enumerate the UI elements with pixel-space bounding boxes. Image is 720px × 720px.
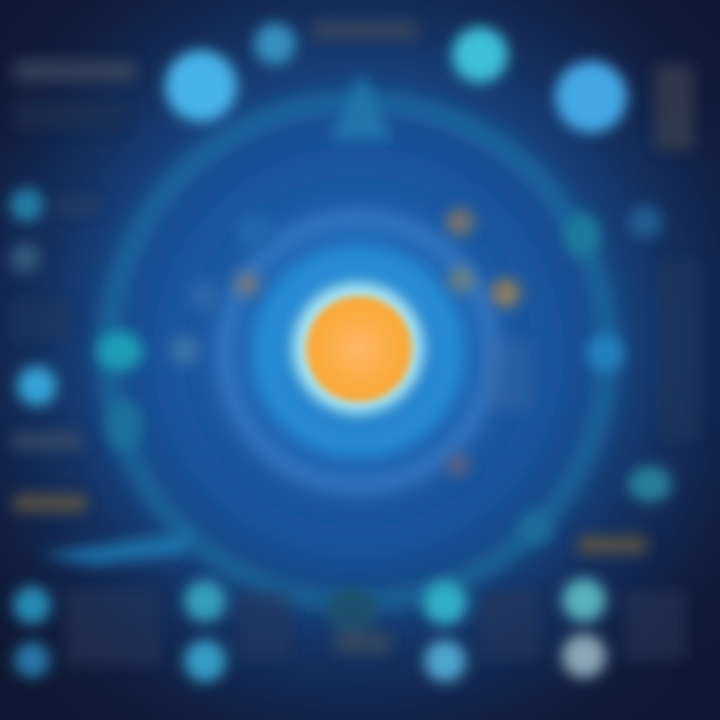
icon: left node pale xyxy=(170,335,200,365)
icon: bottom column 2 top xyxy=(184,580,226,622)
icon: right arc node xyxy=(564,213,600,257)
icon: bottom column 1 bottom xyxy=(14,642,50,678)
text: bottom center label xyxy=(335,632,390,654)
accent 1 xyxy=(446,208,474,236)
text: right lines xyxy=(660,260,700,440)
sun xyxy=(292,282,424,414)
icon: left circle 3 xyxy=(17,366,57,406)
icon: left circle 2 xyxy=(10,243,40,273)
icon: right teal lower xyxy=(628,466,672,502)
text: bottom lines 4 xyxy=(625,590,685,660)
icon: bottom column 2 bottom xyxy=(184,640,226,682)
central glow xyxy=(270,262,446,438)
icon: inner blue node xyxy=(237,214,273,250)
orbit rings xyxy=(108,102,608,602)
text: bottom lines 1 xyxy=(65,590,160,665)
right icons xyxy=(189,205,672,545)
text: bottom lines 2 xyxy=(240,590,290,660)
text: left label 1 xyxy=(55,198,100,214)
text: top left heading xyxy=(15,60,135,82)
accent 3 xyxy=(491,278,521,308)
icon: right circle upper xyxy=(628,205,662,239)
icon: top right circle xyxy=(555,61,627,133)
icon: small top circle xyxy=(254,23,296,65)
text: left orange label xyxy=(14,494,86,512)
sun halo xyxy=(292,282,424,414)
accent 4 xyxy=(448,267,474,293)
swoosh xyxy=(40,530,195,565)
accent 5 xyxy=(446,453,470,477)
accent 2 xyxy=(234,271,260,297)
left column icons xyxy=(10,188,200,565)
icon: top teal circle xyxy=(452,27,508,83)
text: top heading xyxy=(312,20,417,40)
icon: lower orbit node xyxy=(518,511,552,545)
orange accent nodes xyxy=(234,208,521,477)
icon: left teal node xyxy=(97,331,143,371)
icon: top left circle xyxy=(165,50,237,122)
text: left label 2 xyxy=(12,432,82,450)
text: left lines xyxy=(12,300,72,340)
icon: bottom column 4 bottom xyxy=(562,634,606,678)
icon: inner blue node 2 xyxy=(189,280,221,312)
text: right orange label xyxy=(578,536,646,554)
icon: triangle xyxy=(330,72,392,140)
icon: bottom center xyxy=(326,588,378,632)
text: inner right lines xyxy=(490,340,530,410)
icon: bottom column 1 top xyxy=(13,586,51,624)
icon: bottom column 4 top xyxy=(562,578,606,622)
icon: left orbit shape xyxy=(107,399,143,451)
text: top right block xyxy=(655,65,693,150)
bottom row xyxy=(13,578,685,682)
top icons xyxy=(165,23,627,140)
icon: bottom column 3 bottom xyxy=(424,640,466,682)
icon: left circle 1 xyxy=(10,188,44,222)
text: bottom lines 3 xyxy=(480,590,540,660)
blurred text blocks xyxy=(12,20,700,554)
icon: right orbit node xyxy=(586,334,624,372)
icon: bottom column 3 top xyxy=(423,581,467,625)
sun core xyxy=(306,296,412,402)
text: top left lines xyxy=(15,100,125,130)
